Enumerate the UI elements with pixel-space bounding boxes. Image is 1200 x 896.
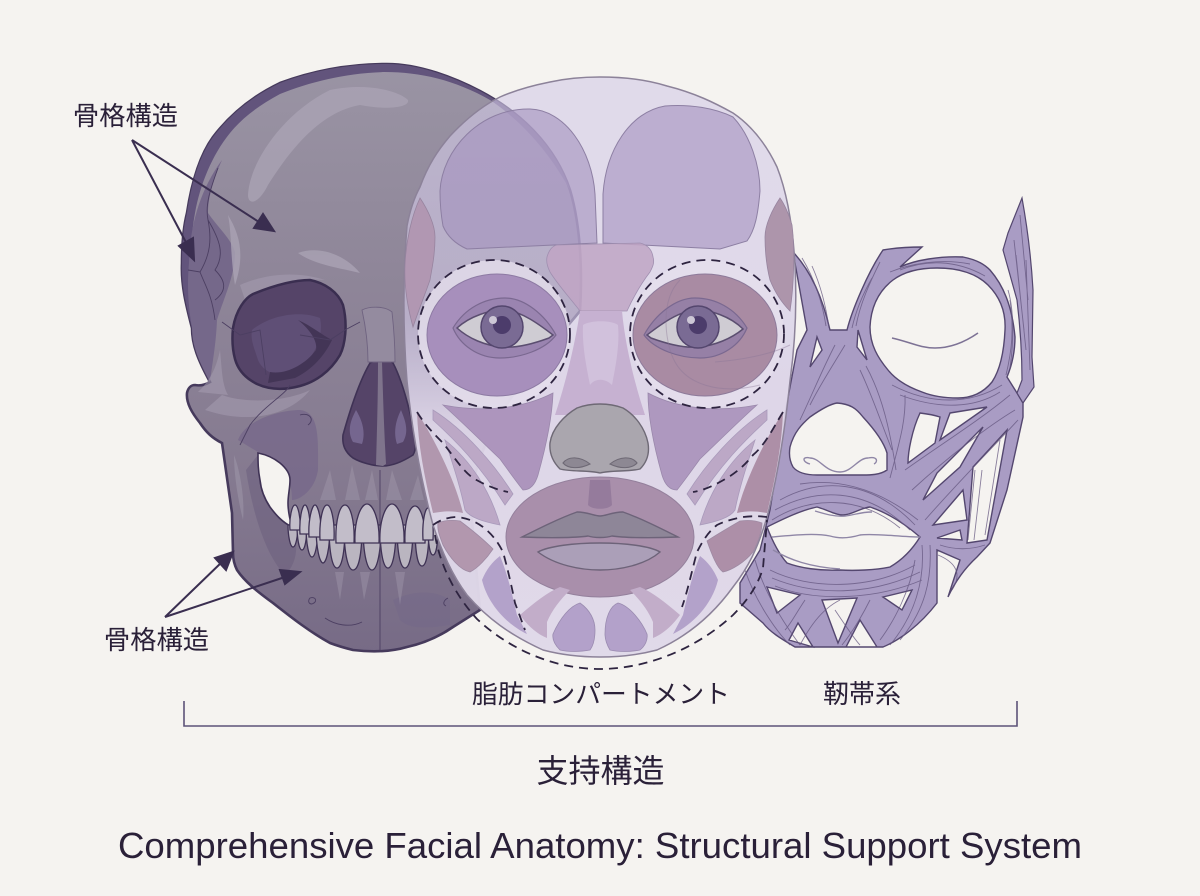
ligament: right strip: [1003, 198, 1034, 403]
face: perioral muscle: [506, 477, 694, 597]
skull: lower teeth: [288, 525, 438, 570]
skull: mandible opening: [258, 453, 292, 527]
skull: cranium and jaw silhouette: [182, 64, 581, 651]
face: bridge highlight: [583, 321, 618, 385]
bracket: [184, 701, 1017, 726]
face: chin pad right: [605, 603, 647, 652]
face: masseter right: [737, 412, 783, 513]
skull: root streaks: [320, 465, 424, 605]
arrow to jaw angle: [165, 560, 224, 617]
right highlight: [687, 316, 695, 324]
face: nostrils: [563, 458, 637, 468]
skull: socket recess: [268, 320, 332, 383]
face: chin pink left: [520, 587, 570, 638]
face: forehead right: [603, 105, 760, 249]
face: philtrum: [588, 480, 612, 509]
face: buccal right: [707, 520, 762, 572]
face: dashed compartment lines: [417, 260, 784, 669]
face: base outline: [404, 77, 796, 657]
ligament: lip lines: [772, 511, 920, 569]
label: skeletal structure bottom: 骨格構造: [104, 625, 209, 655]
skull: socket inner: [252, 314, 321, 376]
face: nose bridge: [555, 311, 645, 415]
arrowhead jaw angle: [215, 552, 233, 570]
right pupil: [689, 316, 707, 334]
skull: forehead highlights: [228, 87, 408, 285]
skull: cracks and sutures: [188, 168, 448, 650]
face: mid cheek right: [648, 393, 757, 490]
left orbit muscle: [427, 274, 567, 396]
arrow to mandible: [165, 576, 288, 617]
left iris: [481, 306, 523, 348]
face: chin pad left: [553, 603, 595, 652]
skull: nasal bone: [362, 307, 395, 362]
skull illustration: [182, 64, 581, 651]
face: zygomatic strip left: [433, 410, 513, 525]
face: lower lip: [538, 543, 660, 570]
arrows: bottom label: [165, 552, 300, 617]
left lid socket: [453, 298, 556, 358]
face: jowl right: [673, 556, 718, 634]
right lid socket: [644, 298, 747, 358]
face: jowl left: [482, 556, 527, 634]
skull: cheek hollow: [238, 410, 318, 500]
skull: eye socket: [232, 280, 346, 389]
label: retaining ligaments: 靭帯系: [823, 679, 901, 709]
label: skeletal structure top: 骨格構造: [73, 101, 178, 131]
right iris: [677, 306, 719, 348]
left eye white: [457, 310, 553, 347]
face: buccal left: [438, 520, 493, 572]
arrowhead forehead: [254, 214, 274, 231]
face: masseter left: [417, 412, 463, 513]
skull: upper teeth: [290, 504, 433, 543]
face: ligament show-through on right orbit: [666, 280, 790, 389]
face: upper lip: [522, 512, 678, 538]
right orbit fat pad ring: [630, 260, 784, 408]
face: nose: [550, 404, 649, 473]
arrow to temple: [132, 140, 190, 250]
left highlight: [489, 316, 497, 324]
right orbit muscle: [633, 274, 777, 396]
face: eye region right: [630, 260, 784, 408]
face: mid cheek left: [443, 393, 553, 490]
face: chin pink right: [630, 587, 680, 638]
skull: temporal shade: [188, 160, 235, 382]
ligament: nose line: [804, 458, 876, 472]
face illustration: [404, 77, 796, 669]
skull: nasal septum: [376, 362, 386, 466]
label: fat compartments: 脂肪コンパートメント: [472, 680, 730, 709]
face: zygomatic strip right: [687, 410, 767, 525]
ligament network figure: [740, 198, 1034, 647]
face: temple left: [405, 198, 435, 327]
face: forehead left: [440, 109, 597, 249]
arrows: top label: [132, 140, 274, 260]
arrowhead mandible: [280, 570, 300, 584]
skull: ramus shading: [246, 455, 296, 575]
ligament: main web: [740, 247, 1023, 647]
skull: cheekbone and brow shading: [198, 275, 325, 417]
title: Comprehensive Facial Anatomy: Structural Support System: [118, 825, 1082, 866]
face: glabella: [547, 243, 654, 311]
ligament: fibres: [745, 215, 1030, 645]
arrowhead temple: [179, 238, 194, 260]
face: eye region left: [418, 260, 570, 408]
skull: dark cranial rim: [182, 64, 570, 328]
skull: ramus highlight: [234, 455, 243, 520]
skull: nasal cavity lobes: [350, 410, 406, 444]
face: temple right: [765, 198, 794, 311]
right eye white: [647, 310, 743, 347]
skull: nasal aperture: [343, 361, 416, 466]
left pupil: [493, 316, 511, 334]
label: support structure: 支持構造: [536, 753, 665, 789]
ligament: closed eyelid line: [892, 333, 978, 348]
skull: chin shading: [393, 592, 450, 627]
left orbit fat pad ring: [418, 260, 570, 408]
arrow to forehead: [132, 140, 262, 224]
